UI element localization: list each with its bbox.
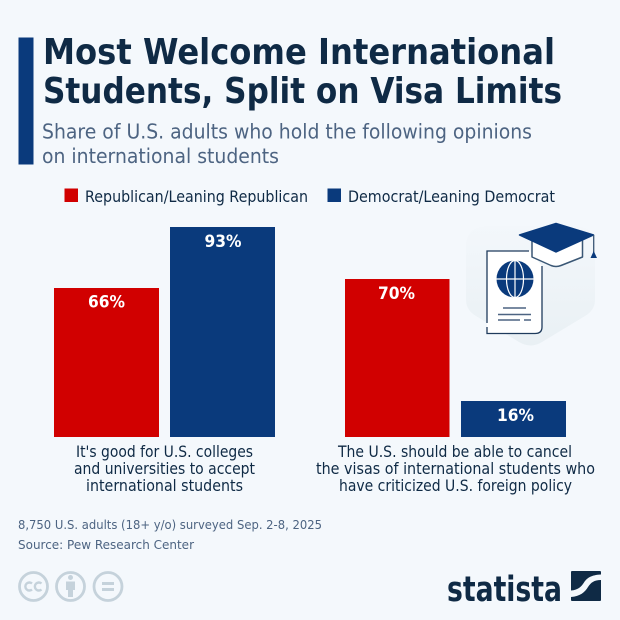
subtitle: Share of U.S. adults who hold the following opinions bbox=[42, 120, 532, 144]
bar chart: good to accept bbox=[54, 227, 275, 495]
bar: Republican 70% bbox=[345, 279, 450, 437]
category label bbox=[74, 442, 255, 495]
title: Most Welcome International bbox=[43, 32, 555, 73]
category label bbox=[316, 442, 595, 495]
bar: Republican 66% bbox=[54, 288, 159, 437]
title accent bar bbox=[18, 38, 34, 164]
icon: passport and graduation cap bbox=[466, 224, 597, 346]
footnote and source bbox=[18, 517, 322, 552]
bar: Democrat 16%: 16% bbox=[497, 406, 534, 426]
footnote and source: Source: Pew Research Center bbox=[18, 537, 195, 552]
category label: and universities to accept bbox=[74, 459, 255, 478]
bar: Democrat 93%: 93% bbox=[204, 232, 242, 252]
category label: have criticized U.S. foreign policy bbox=[339, 476, 572, 495]
statista logo: statista bbox=[447, 570, 562, 610]
legend: Democrat/Leaning Democrat bbox=[348, 187, 555, 206]
category label: international students bbox=[86, 476, 243, 495]
title: Students, Split on Visa Limits bbox=[43, 71, 562, 112]
category label: It's good for U.S. colleges bbox=[76, 442, 253, 461]
category label: the visas of international students who bbox=[316, 459, 595, 478]
footnote and source: 8,750 U.S. adults (18+ y/o) surveyed Sep. 2-8, 2025 bbox=[18, 517, 322, 532]
title bbox=[43, 32, 562, 112]
bar: Republican 70%: 70% bbox=[378, 284, 415, 304]
category label: The U.S. should be able to cancel bbox=[337, 442, 572, 461]
bar: Democrat 93% bbox=[170, 227, 275, 437]
subtitle: on international students bbox=[42, 144, 279, 168]
icon: creative commons licence bbox=[20, 572, 122, 600]
subtitle bbox=[42, 120, 532, 168]
bar chart: cancel visas bbox=[316, 279, 595, 495]
legend: Republican/Leaning Republican bbox=[85, 187, 308, 206]
bar: Democrat 16% bbox=[461, 401, 566, 437]
bar: Republican 66%: 66% bbox=[88, 292, 125, 312]
legend bbox=[64, 187, 555, 206]
